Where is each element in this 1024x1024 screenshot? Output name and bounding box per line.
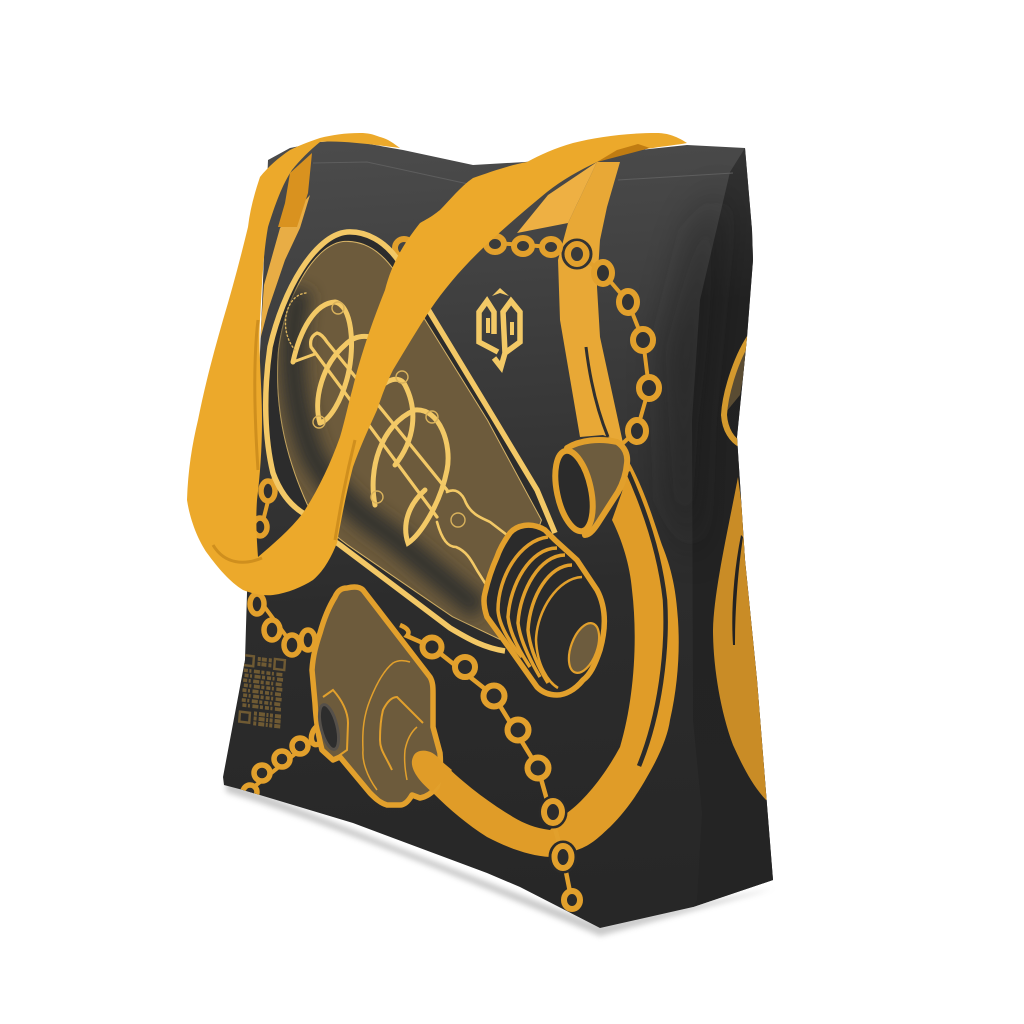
fold shadow on front: [662, 219, 718, 468]
side print: bottom loop: [713, 477, 770, 800]
shadow under bag: [226, 780, 775, 936]
QR code: [239, 655, 286, 727]
shoulder strap: [187, 133, 687, 595]
side print: top cone: [724, 337, 750, 445]
panel: bag front: [223, 140, 773, 928]
printed artwork: [239, 162, 770, 909]
bulb contact tip: [568, 622, 600, 674]
chain: left side: [250, 473, 315, 655]
strap tab: left: [278, 153, 312, 227]
top seam: [313, 162, 733, 185]
chain: top right: [395, 236, 659, 446]
filament: [285, 293, 507, 583]
strap tab: right: [517, 162, 597, 233]
strap underside fold: [597, 144, 650, 162]
cable: [412, 162, 679, 857]
tote bag body: [223, 140, 773, 928]
chain: centre: [400, 625, 580, 909]
cone connector: [549, 440, 627, 535]
logo: [479, 288, 520, 367]
light bulb glass: [266, 232, 555, 651]
lamp socket: [312, 587, 452, 805]
bulb inner shading: [293, 290, 480, 610]
left print strip: [260, 195, 310, 340]
bulb screw base: [484, 525, 605, 695]
panel: bag side gusset: [692, 148, 773, 907]
chain: bottom left: [240, 725, 318, 795]
upper cable band: [558, 162, 623, 443]
cable highlight gap: [628, 472, 666, 766]
